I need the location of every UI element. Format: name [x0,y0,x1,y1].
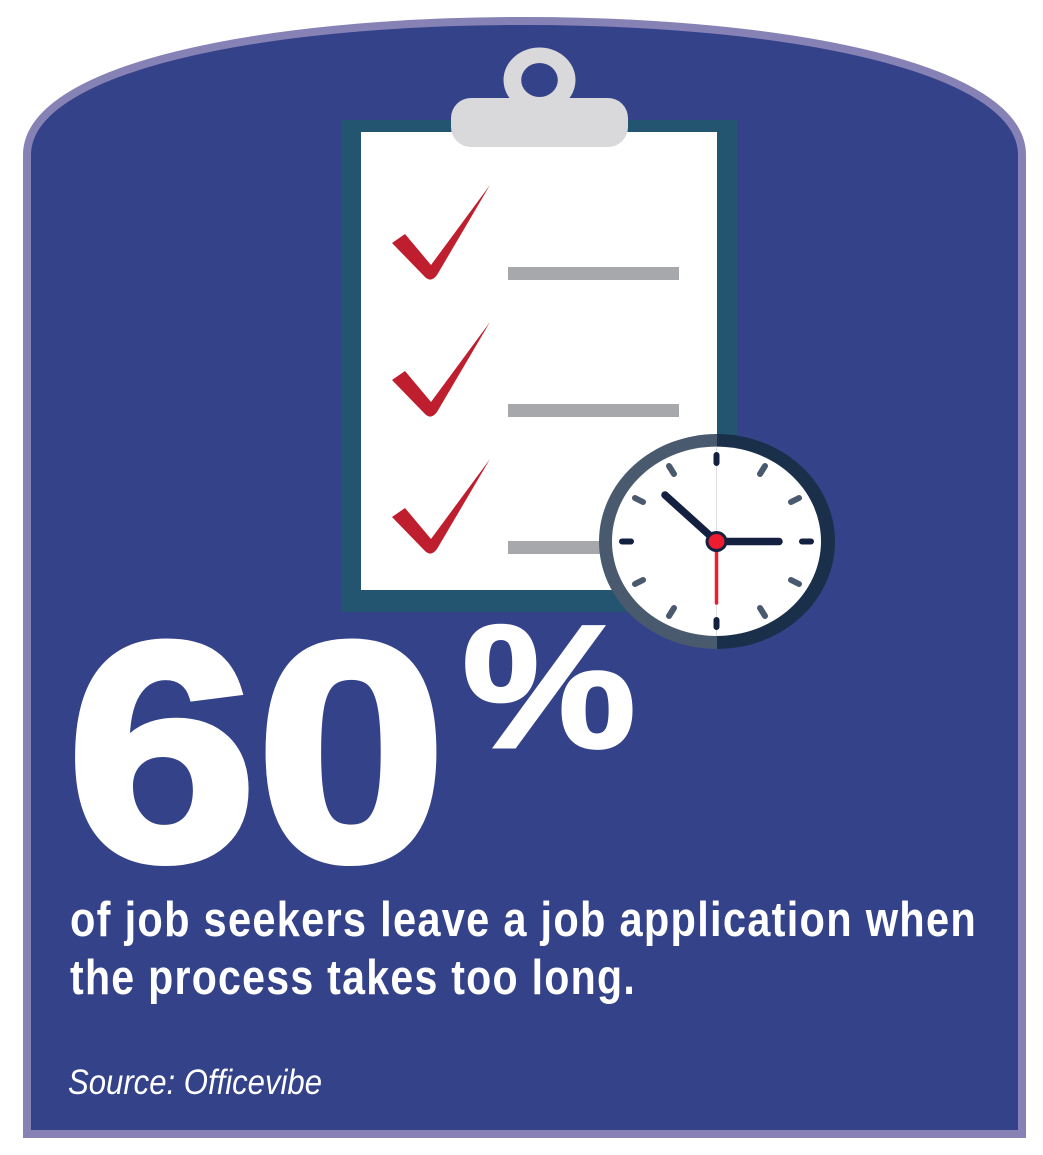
clock tick marks [622,447,811,636]
icon: clipboard clip [451,48,628,147]
checklist line 1 [508,267,679,280]
checklist line 3 [508,541,608,554]
big number: 60: 60 [67,578,446,925]
description text: the process takes too long. [70,951,636,1005]
icon: clipboard [341,48,737,612]
icon: checkmark 2 [392,322,490,417]
icon: clock [599,434,835,649]
icon: checkmark 1 [392,185,490,280]
clock hands [665,495,779,603]
source: Source: Officevibe [68,1063,322,1102]
checklist line 2 [508,404,679,417]
icon: checkmark 3 [392,459,490,554]
percent sign: % [462,590,636,785]
description text [70,893,977,1005]
